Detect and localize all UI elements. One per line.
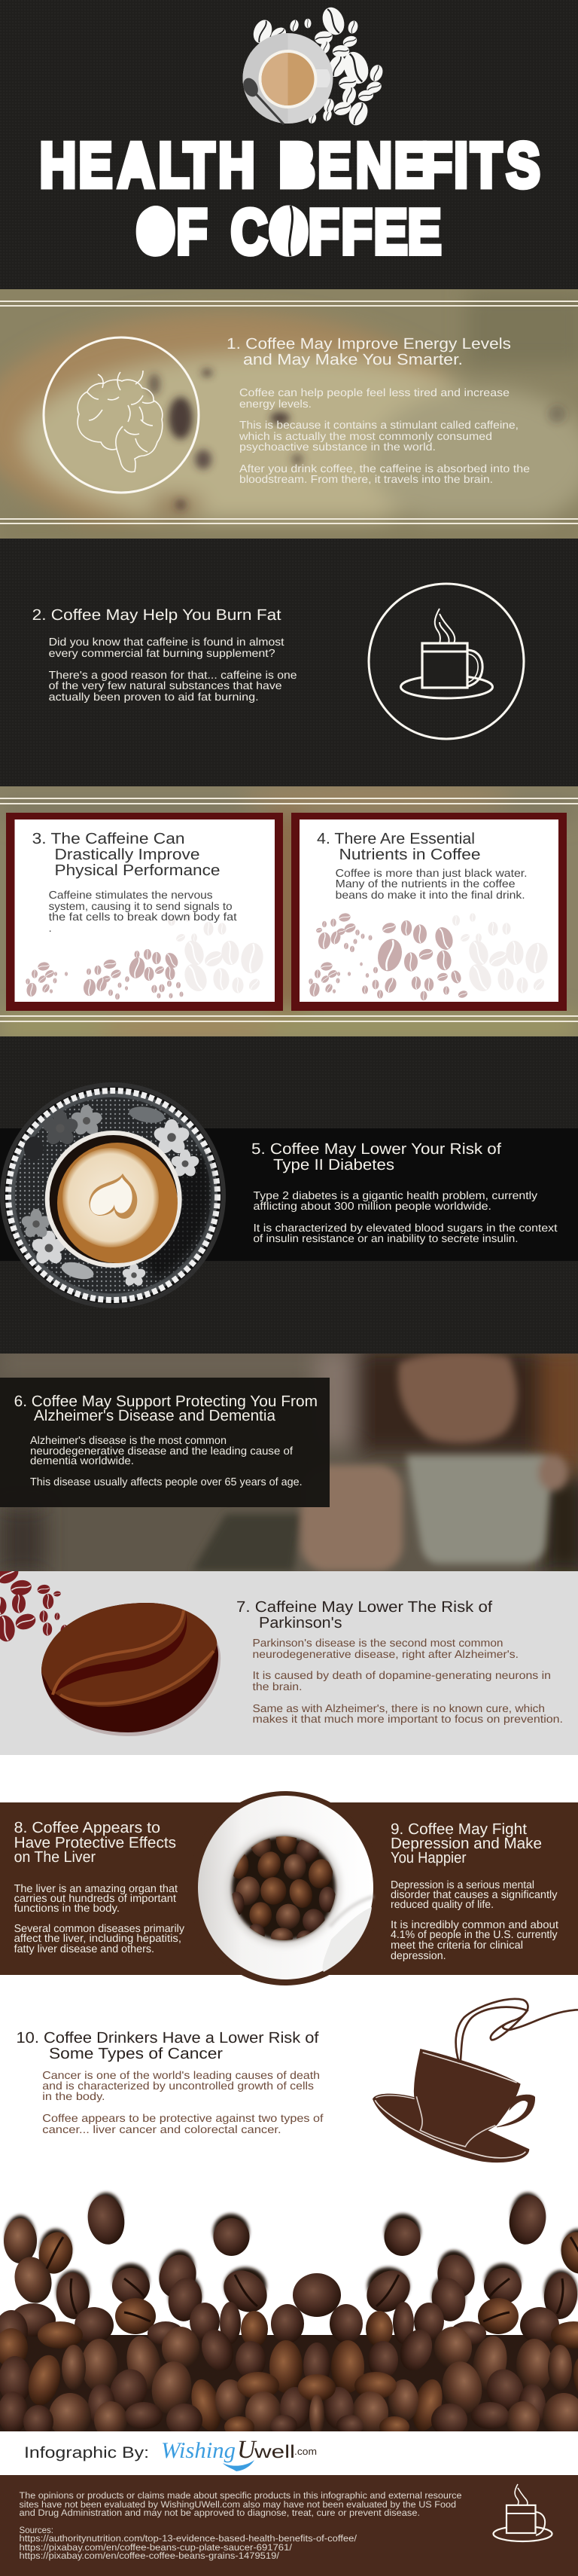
text: section 1 body: which is actually the most commonly consumed [239, 431, 492, 443]
panel: section 7 parkinson's [0, 1561, 578, 1755]
text: section 7 body: the brain. [253, 1681, 303, 1693]
blurred latte photo background [0, 289, 578, 542]
heading: section 5: Type II Diabetes [273, 1156, 394, 1174]
text: sources [20, 2525, 357, 2561]
heading: section 10: Some Types of Cancer [49, 2045, 223, 2062]
text: section 1 body: psychoactive substance in the world. [239, 441, 436, 453]
text: section 7 body: It is caused by death of dopamine-generating neurons in [253, 1670, 551, 1682]
blurred photo of woman with cup [0, 1348, 578, 1574]
text: disclaimer: The opinions or products or claims made about specific products in this infographic and external resource [20, 2490, 462, 2501]
heading: section 3: Physical Performance [54, 862, 220, 879]
panel: section 10 cancer [17, 1999, 578, 2162]
icon: footer coffee mug [494, 2484, 552, 2541]
text: section 3 body: the fat cells to break down body fat [49, 911, 237, 923]
text: section 3 body: . [49, 923, 52, 935]
text: section 5 body: It is characterized by elevated blood sugars in the context [253, 1222, 557, 1235]
decoration: rose beans [26, 949, 184, 1000]
heading: section 9: Depression and Make [391, 1835, 542, 1852]
text: section 6 body: dementia worldwide. [30, 1455, 134, 1467]
text: section 2 body: There's a good reason for that... caffeine is one [49, 670, 297, 682]
image: cup of coffee beans [198, 1796, 373, 1979]
text: section 4 body: beans do make it into the final drink. [336, 890, 525, 902]
heading: section 4: Nutrients in Coffee [339, 846, 480, 863]
heading: section 6: 6. Coffee May Support Protecting You From [14, 1393, 318, 1410]
icon: coffee mug in circle [369, 584, 524, 739]
blurred photo background [0, 785, 578, 1039]
card: essential nutrients [291, 813, 567, 1011]
text: section 9 body [391, 1879, 558, 1962]
title: OF COFFEE [136, 196, 441, 267]
text: section 5 body [253, 1190, 557, 1245]
text: section 1 body: After you drink coffee, the caffeine is absorbed into the [239, 463, 530, 475]
illustration: steaming teacup [373, 1999, 578, 2162]
decoration: rose beans [309, 912, 468, 1000]
text: section 3 body: system, causing it to send signals to [49, 901, 233, 913]
text: section 2 body: Did you know that caffeine is found in almost [49, 636, 284, 649]
icon: coffee cup with beans [240, 4, 385, 128]
text: section 8 body: Several common diseases primarily [14, 1923, 185, 1935]
text: section 9 body: reduced quality of life. [391, 1899, 494, 1911]
heading: section 5: 5. Coffee May Lower Your Risk of [251, 1140, 501, 1158]
text: section 7 body: neurodegenerative disease, right after Alzheimer's. [253, 1649, 519, 1661]
heading: section 1 [227, 335, 511, 368]
credit band [0, 2431, 578, 2475]
heading: section 10: 10. Coffee Drinkers Have a Lower Risk of [17, 2029, 319, 2046]
heading: section 6 [14, 1393, 318, 1424]
header panel [0, 0, 578, 289]
text: section 9 body: It is incredibly common and about [391, 1919, 558, 1931]
panel: section 6 alzheimer's [0, 1348, 578, 1574]
decoration: pale beans [452, 913, 549, 995]
text: section 10 body [42, 2070, 324, 2136]
text: section 10 body: and is characterized by uncontrolled growth of cells [42, 2080, 314, 2092]
heading: section 1: 1. Coffee May Improve Energy Levels [227, 335, 511, 353]
logo: WishingUwell [161, 2436, 317, 2471]
heading: section 4: 4. There Are Essential [317, 830, 475, 847]
text: section 2 body: actually been proven to aid fat burning. [49, 691, 259, 704]
text: section 9 body: depression. [391, 1950, 446, 1962]
logo: WishingUwell: .com [294, 2446, 317, 2457]
decoration: pale beans [168, 913, 265, 995]
text: section 3 body [49, 890, 237, 935]
heading: section 6: Alzheimer's Disease and Dementia [34, 1407, 276, 1424]
panel: section 2 burn fat [0, 539, 578, 786]
heading: section 8: on The Liver [14, 1848, 96, 1866]
text: section 8 body: The liver is an amazing organ that [14, 1883, 178, 1895]
text: section 6 body [30, 1435, 303, 1488]
decoration: mirrored left half of beans [0, 2192, 310, 2439]
text: section 2 body: of the very few natural substances that have [49, 680, 282, 692]
heading: section 3 [32, 830, 220, 879]
text: section 10 body: cancer... liver cancer and colorectal cancer. [42, 2124, 281, 2136]
text: section 7 body: Parkinson's disease is the second most common [253, 1637, 503, 1650]
text: section 4 body [336, 868, 528, 902]
illustration: large coffee bean [41, 1603, 221, 1736]
text: section 1 body: Coffee can help people feel less tired and increase [239, 387, 510, 399]
text: section 10 body: in the body. [42, 2091, 105, 2103]
card: physical performance [6, 813, 283, 1011]
text: section 8 body: fatty liver disease and others. [14, 1943, 154, 1955]
text: section 5 body: of insulin resistance or an inability to secrete insulin. [253, 1233, 518, 1245]
panel: section 1 energy [0, 289, 578, 542]
text: disclaimer: and Drug Administration and may not be approved to diagnose, treat, cure or prevent disease. [20, 2507, 420, 2518]
text: disclaimer [20, 2490, 462, 2518]
text: section 1 body: bloodstream. From there, it travels into the brain. [239, 474, 493, 486]
text: section 5 body: Type 2 diabetes is a gigantic health problem, currently [253, 1190, 538, 1202]
text: section 1 body: This is because it contains a stimulant called caffeine, [239, 420, 519, 432]
panel: sections 3 and 4 band [0, 785, 578, 1039]
text: sources: Sources: [20, 2525, 53, 2535]
text: section 1 body [239, 387, 530, 486]
panel: section 5 diabetes [0, 1036, 578, 1354]
panel: sections 8 and 9 [0, 1791, 578, 1985]
text: section 9 body: meet the criteria for clinical [391, 1940, 523, 1952]
text: sources: https://pixabay.com/en/coffee-beans-cup-plate-saucer-691761/ [20, 2542, 293, 2553]
heading: section 9: You Happier [391, 1849, 467, 1866]
heading: section 7: Parkinson's [259, 1614, 342, 1631]
text: sources: https://pixabay.com/en/coffee-coffee-beans-grains-1479519/ [20, 2550, 280, 2561]
text: section 8 body: affect the liver, including hepatitis, [14, 1933, 181, 1945]
image: latte on floral saucer [0, 1082, 226, 1308]
text: disclaimer: sites have not been evaluated by WishingUWell.com also may have not been evaluated by the US Food [20, 2499, 456, 2510]
text: section 9 body: Depression is a serious mental [391, 1879, 534, 1891]
heading: section 3: Drastically Improve [54, 846, 200, 863]
logo: WishingUwell: well [254, 2442, 295, 2462]
heading: section 7: 7. Caffeine May Lower The Risk of [236, 1598, 492, 1616]
heading: section 8 [14, 1819, 176, 1866]
text: section 4 body: Many of the nutrients in the coffee [336, 878, 516, 890]
image: pile of coffee beans [0, 2192, 578, 2439]
heading: section 8: Have Protective Effects [14, 1834, 176, 1851]
icon: brain in circle [44, 337, 199, 493]
title [40, 130, 540, 267]
heading: section 9: 9. Coffee May Fight [391, 1821, 527, 1838]
text: section 7 body: makes it that much more important to focus on prevention. [253, 1714, 563, 1726]
logo: WishingUwell: Wishing [161, 2438, 236, 2463]
text: section 6 body: Alzheimer's disease is the most common [30, 1435, 227, 1447]
footer panel [0, 2475, 578, 2576]
text: section 2 body [49, 636, 297, 704]
logo: WishingUwell: U [237, 2436, 257, 2464]
heading: section 7 [236, 1598, 492, 1631]
text: section 10 body: Coffee appears to be protective against two types of [42, 2113, 324, 2125]
text: section 3 body: Caffeine stimulates the nervous [49, 890, 213, 902]
text: section 6 body: neurodegenerative disease and the leading cause of [30, 1445, 294, 1457]
heading: section 2: 2. Coffee May Help You Burn Fat [32, 606, 281, 624]
text: section 7 body: Same as with Alzheimer's, there is no known cure, which [253, 1703, 545, 1715]
text: section 9 body: disorder that causes a significantly [391, 1889, 558, 1901]
decoration: small maroon beans [0, 1571, 67, 1642]
text: section 8 body [14, 1883, 185, 1955]
text: section 9 body: 4.1% of people in the U.S. currently [391, 1929, 558, 1941]
text: section 8 body: functions in the body. [14, 1903, 120, 1915]
text: section 1 body: energy levels. [239, 398, 312, 411]
text: section 8 body: carries out hundreds of important [14, 1893, 176, 1905]
title: HEALTH BENEFITS [40, 130, 540, 200]
text: section 5 body: afflicting about 300 million people worldwide. [253, 1201, 491, 1213]
heading: section 5 [251, 1140, 501, 1174]
heading: section 3: 3. The Caffeine Can [32, 830, 185, 847]
text: section 6 body: This disease usually affects people over 65 years of age. [30, 1476, 303, 1488]
text: section 2 body: every commercial fat burning supplement? [49, 648, 275, 660]
heading: section 10 [17, 2029, 319, 2062]
heading: section 8: 8. Coffee Appears to [14, 1819, 160, 1836]
text: infographic by: Infographic By: [24, 2444, 149, 2462]
heading: section 9 [391, 1821, 542, 1866]
heading: section 4 [317, 830, 480, 863]
text: section 4 body: Coffee is more than just black water. [336, 868, 528, 880]
text: section 7 body [253, 1637, 563, 1726]
text: section 10 body: Cancer is one of the world's leading causes of death [42, 2070, 320, 2082]
heading: section 1: and May Make You Smarter. [243, 351, 463, 368]
text: sources: https://authoritynutrition.com/top-13-evidence-based-health-benefits-of-coffee/ [20, 2533, 357, 2544]
